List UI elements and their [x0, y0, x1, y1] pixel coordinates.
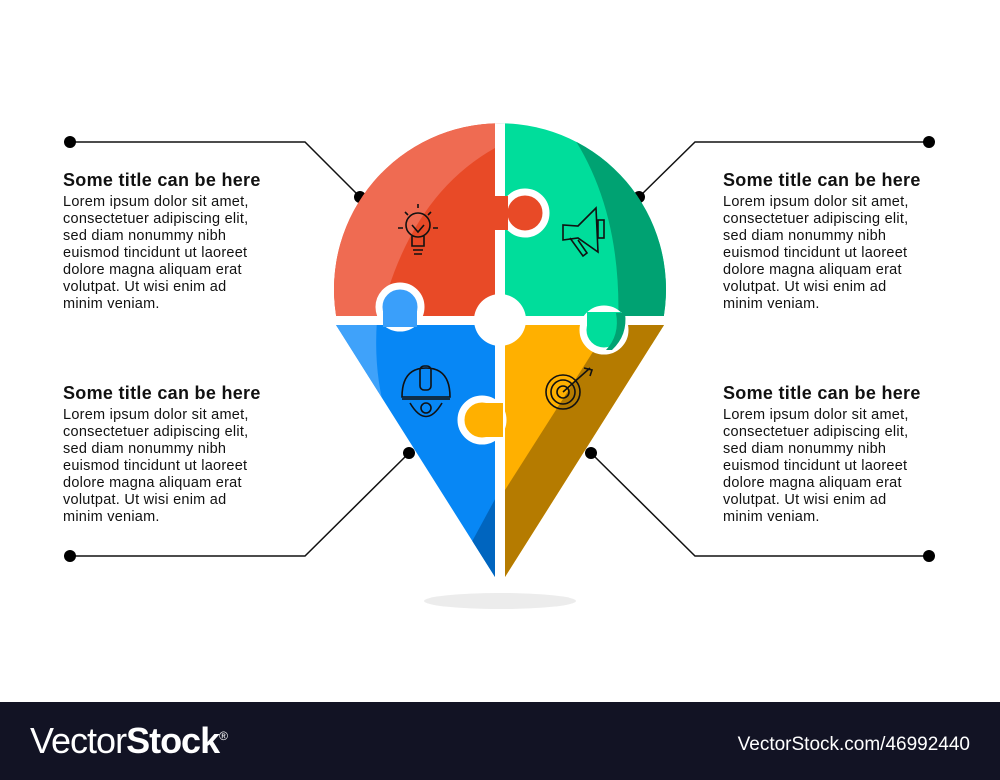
icon: light bulb	[398, 204, 438, 254]
text block: top right: Some title can be here	[723, 170, 921, 190]
text block: top right: dolore magna aliquam erat	[723, 262, 902, 278]
text block: top right: consectetuer adipiscing elit,	[723, 211, 908, 227]
text block: bottom right: Lorem ipsum dolor sit amet,	[723, 407, 909, 423]
piece: red	[334, 123, 500, 316]
connector: top right	[633, 136, 935, 203]
text block: bottom right: minim veniam.	[723, 509, 820, 525]
pin puzzle	[334, 123, 666, 577]
footer banner	[0, 702, 1000, 780]
text block: top right: minim veniam.	[723, 296, 820, 312]
text block: top right: sed diam nonummy nibh	[723, 228, 886, 244]
text block: bottom right: sed diam nonummy nibh	[723, 441, 886, 457]
text block: top left: sed diam nonummy nibh	[63, 228, 226, 244]
text block: top left: Some title can be here	[63, 170, 261, 190]
text block: bottom left: Lorem ipsum dolor sit amet,	[63, 407, 249, 423]
icon: target	[546, 368, 592, 409]
piece: green	[500, 123, 666, 345]
gaps	[495, 100, 505, 600]
text block: bottom right: dolore magna aliquam erat	[723, 475, 902, 491]
text block: bottom left: consectetuer adipiscing elit,	[63, 424, 248, 440]
connector: bottom right	[585, 447, 935, 562]
text block: top right: euismod tincidunt ut laoreet	[723, 245, 907, 261]
text block: top left: minim veniam.	[63, 296, 160, 312]
text block: bottom left: volutpat. Ut wisi enim ad	[63, 492, 226, 508]
piece: blue	[336, 325, 495, 577]
text block: bottom left	[63, 383, 261, 525]
text block: top right: volutpat. Ut wisi enim ad	[723, 279, 886, 295]
text block: top right	[723, 170, 921, 312]
icon: helmet gear	[402, 366, 450, 416]
text block: top left: volutpat. Ut wisi enim ad	[63, 279, 226, 295]
text block: bottom left: minim veniam.	[63, 509, 160, 525]
text block: bottom left: Some title can be here	[63, 383, 261, 403]
text block: bottom left: dolore magna aliquam erat	[63, 475, 242, 491]
text block: bottom right: Some title can be here	[723, 383, 921, 403]
connector: bottom left	[64, 447, 415, 562]
piece: yellow	[505, 325, 664, 577]
text block: bottom right: consectetuer adipiscing elit,	[723, 424, 908, 440]
text block: top left: dolore magna aliquam erat	[63, 262, 242, 278]
footer url: VectorStock.com/46992440	[738, 734, 970, 755]
knobs	[504, 192, 546, 234]
text block: bottom left: euismod tincidunt ut laoreet	[63, 458, 247, 474]
text block: top left	[63, 170, 261, 312]
connector lines and pin graphic	[64, 123, 935, 609]
connector: top left	[64, 136, 366, 203]
shadow	[424, 593, 576, 609]
text block: top left: Lorem ipsum dolor sit amet,	[63, 194, 249, 210]
text block: top left: euismod tincidunt ut laoreet	[63, 245, 247, 261]
text block: bottom right	[723, 383, 921, 525]
text block: top right: Lorem ipsum dolor sit amet,	[723, 194, 909, 210]
footer logo: VectorStock®	[30, 720, 227, 761]
text block: bottom right: volutpat. Ut wisi enim ad	[723, 492, 886, 508]
icon: megaphone	[563, 208, 604, 256]
text block: bottom right: euismod tincidunt ut laoreet	[723, 458, 907, 474]
text block: bottom left: sed diam nonummy nibh	[63, 441, 226, 457]
text block: top left: consectetuer adipiscing elit,	[63, 211, 248, 227]
